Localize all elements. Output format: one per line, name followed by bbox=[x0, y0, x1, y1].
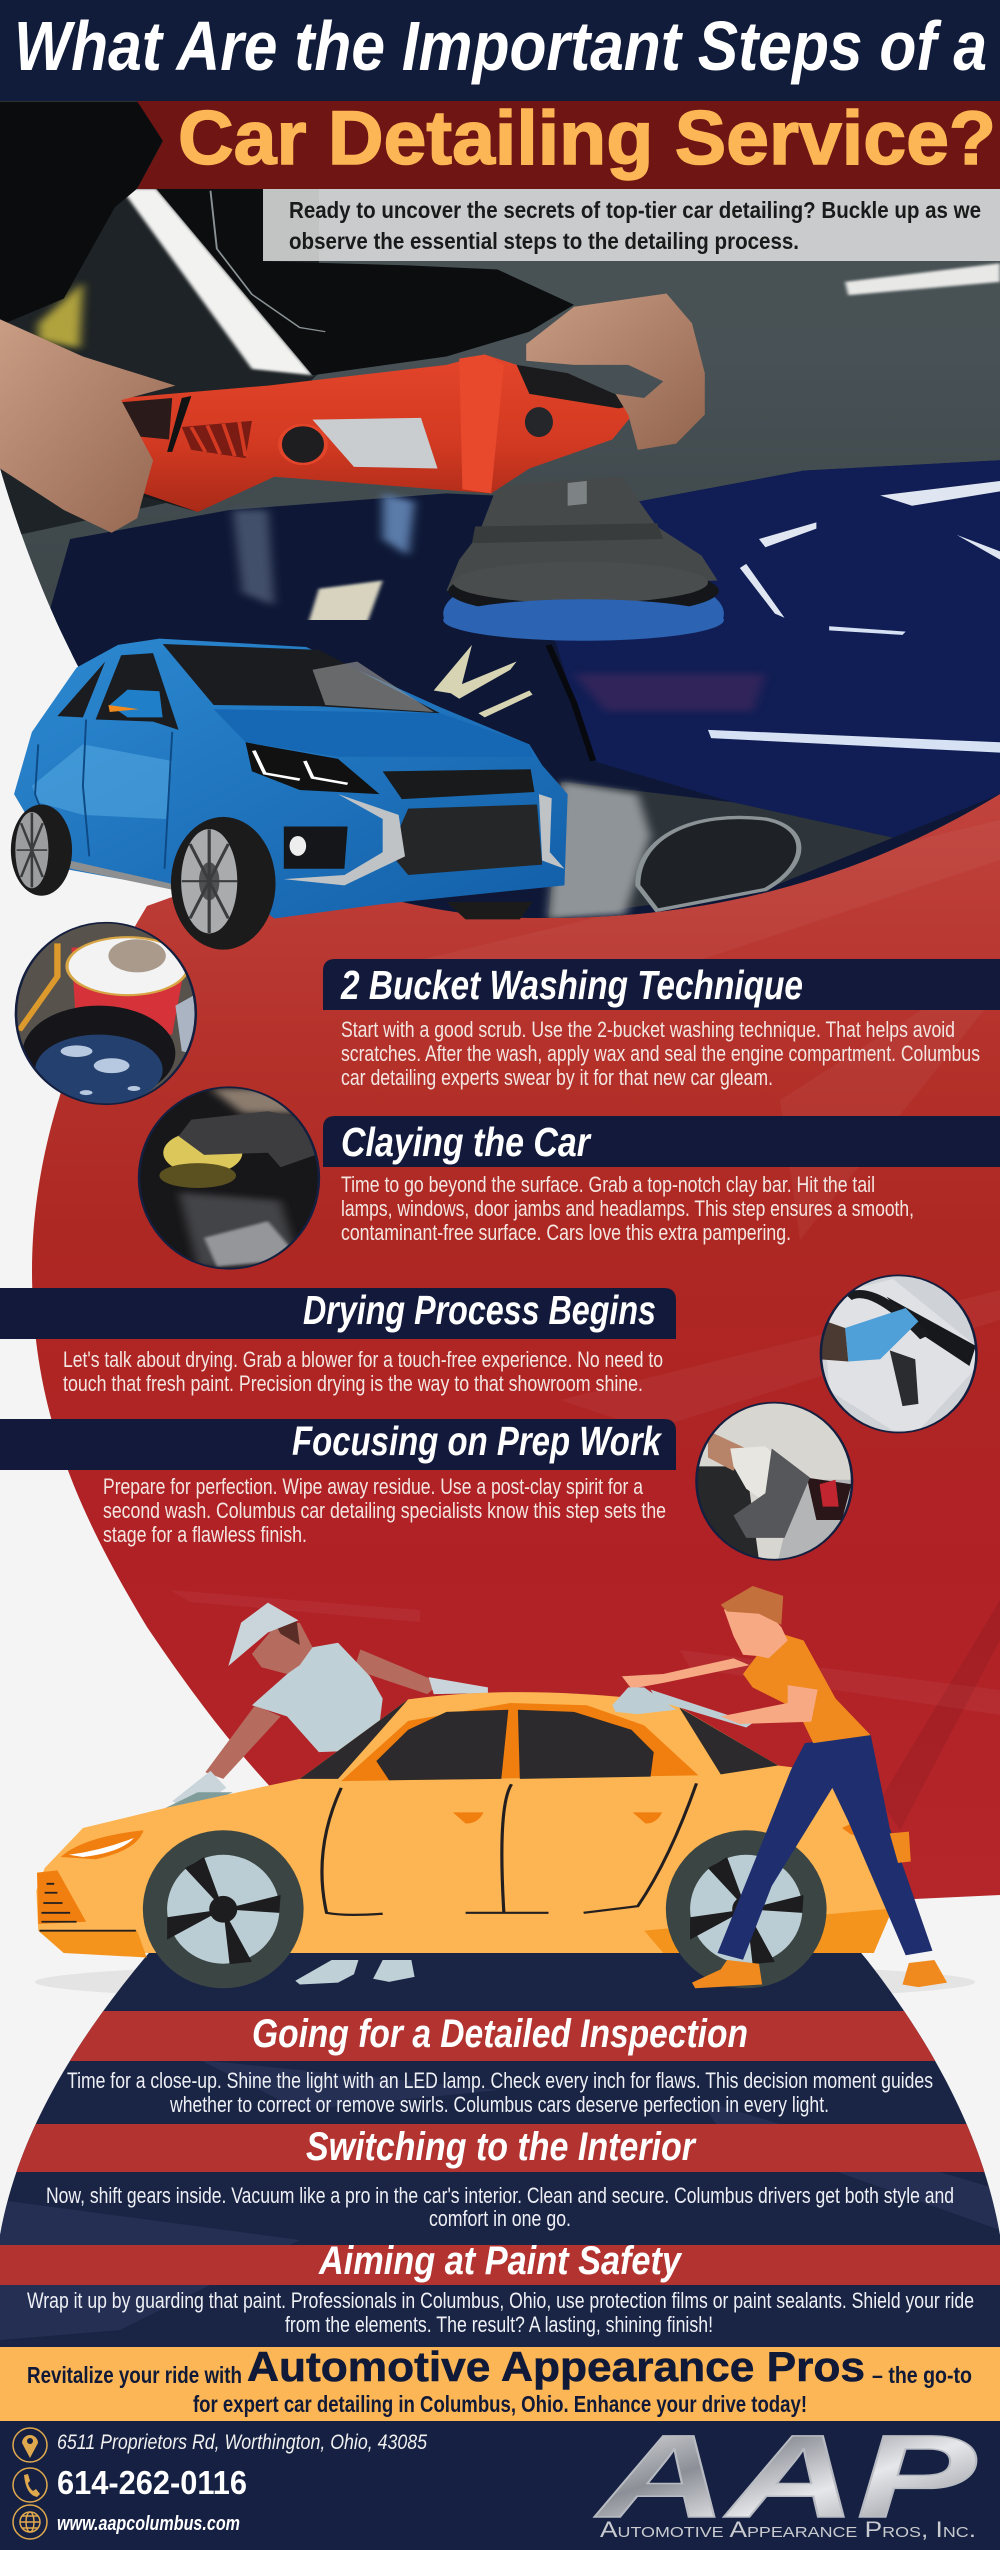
blue car: grille bbox=[383, 769, 534, 799]
shoes of both workers bbox=[295, 1960, 947, 1988]
blue car: sill bbox=[51, 856, 179, 890]
text: claying description bbox=[341, 1172, 914, 1245]
left worker bbox=[152, 1603, 488, 1820]
photo circle 3 outline bbox=[821, 1275, 976, 1432]
logo: AAP bbox=[593, 2411, 976, 2543]
right worker: legs bbox=[718, 1734, 932, 1960]
left worker: t-shirt bbox=[252, 1643, 383, 1752]
photo circle 1 outline bbox=[16, 923, 196, 1104]
text: paint safety description bbox=[27, 2288, 974, 2337]
heading: Going for a Detailed Inspection: Going for a Detailed Inspection bbox=[252, 2012, 748, 2056]
text: drying description bbox=[63, 1347, 663, 1396]
blue car: bumper tyre shadow bbox=[446, 902, 533, 919]
yellow car: front wheel bbox=[143, 1830, 304, 1988]
heading: Focusing on Prep Work: Focusing on Prep Work bbox=[292, 1418, 663, 1464]
yellow car: rear wheel bbox=[666, 1830, 827, 1988]
intro text box bbox=[263, 189, 1000, 261]
heading: Aiming at Paint Safety: Aiming at Paint Safety bbox=[318, 2239, 682, 2283]
yellow car: body bbox=[36, 1692, 893, 1953]
right worker: pocket tag bbox=[890, 1832, 911, 1863]
right worker bbox=[612, 1586, 932, 1960]
photo: blue polishing pad bbox=[443, 597, 724, 618]
call to action band: Automotive Appearance Pros bbox=[247, 2343, 865, 2390]
photo: right hand bbox=[526, 294, 705, 450]
text: address: 6511 Proprietors Rd, Worthington, Ohio, 43085 bbox=[57, 2431, 427, 2454]
text: paint safety description: from the elements. The result? A lasting, shining finish! bbox=[285, 2312, 713, 2337]
text: prep work description: Prepare for perfection. Wipe away residue. Use a post-clay spirit for a bbox=[103, 1474, 644, 1499]
photo: polisher head bbox=[446, 496, 718, 591]
right worker: near arm bbox=[721, 1685, 818, 1724]
heading: 2 Bucket Washing Technique: 2 Bucket Washing Technique bbox=[340, 962, 803, 1008]
photo circle: blower drying bbox=[820, 1274, 979, 1435]
text: bucket washing description: car detailing experts swear by it for that new car gleam. bbox=[341, 1065, 773, 1090]
heading: Focusing on Prep Work bbox=[0, 1418, 676, 1470]
logo: AAP: AAP bbox=[593, 2411, 976, 2543]
right worker: shirt bbox=[743, 1632, 871, 1743]
photo circle 4 outline bbox=[696, 1403, 852, 1560]
text: prep work description: stage for a flawless finish. bbox=[103, 1522, 307, 1547]
photo circle: clay bar bbox=[137, 1086, 322, 1271]
yellow car bbox=[36, 1692, 893, 1988]
icon: globe bbox=[13, 2505, 47, 2539]
yellow car: headlight bbox=[61, 1830, 144, 1859]
logo: AAP: Automotive Appearance Pros, Inc. bbox=[600, 2517, 976, 2542]
left worker: cloth bbox=[152, 1792, 233, 1820]
text: prep work description: second wash. Columbus car detailing specialists know this step sets the bbox=[103, 1498, 666, 1523]
text: drying description: Let's talk about drying. Grab a blower for a touch-free experience. No need to bbox=[63, 1347, 663, 1372]
call to action band bbox=[0, 2343, 1000, 2421]
red bar: Going for a Detailed Inspection bbox=[70, 2011, 936, 2061]
photo: left hand bbox=[0, 319, 175, 533]
photo circle 2 outline bbox=[139, 1087, 319, 1269]
subtitle ribbon: Car Detailing Service? bbox=[178, 96, 996, 181]
text: interior description bbox=[46, 2183, 954, 2231]
photo: upper-left black mass bbox=[0, 102, 163, 325]
left worker shoes bbox=[295, 1960, 415, 1984]
left worker: face and neck bbox=[252, 1623, 313, 1674]
text: phone number: 614-262-0116 bbox=[57, 2464, 247, 2501]
red bar: Aiming at Paint Safety bbox=[0, 2245, 1000, 2285]
blue car: door lines bbox=[35, 720, 172, 869]
photo: dark sweater bbox=[156, 189, 574, 375]
icon: location pin bbox=[13, 2428, 47, 2462]
blue car: windows bbox=[57, 644, 440, 730]
heading: Claying the Car bbox=[323, 1116, 1000, 1167]
blue car: rear wheel bbox=[11, 804, 72, 896]
shadow under yellow car bbox=[35, 1962, 975, 2002]
navy dome background bbox=[0, 1953, 1000, 2347]
yellow car: lower trim bbox=[38, 1908, 893, 1957]
icon: blue hatchback car bbox=[11, 639, 568, 1271]
photo circle: towel wipe bbox=[695, 1402, 855, 1562]
call to action band: for expert car detailing in Columbus, Ohio. Enhance your drive today! bbox=[193, 2391, 807, 2417]
yellow car: door lines bbox=[322, 1783, 696, 1915]
left worker: reaching arm bbox=[205, 1705, 281, 1779]
call to action band: Revitalize your ride with bbox=[27, 2362, 242, 2388]
blue car: body bbox=[14, 639, 568, 919]
left worker: hair bbox=[274, 1620, 300, 1645]
illustration: two workers detailing a yellow car bbox=[36, 1274, 979, 1988]
photo: sweater fuzzy edge bbox=[210, 191, 325, 332]
blue car: hood shading bbox=[214, 709, 533, 757]
text: claying description: contaminant-free surface. Cars love this extra pampering. bbox=[341, 1220, 791, 1245]
right worker: far arm bbox=[622, 1658, 749, 1689]
photo: light streaks bbox=[38, 189, 1000, 375]
blue car: front wheel bbox=[171, 817, 276, 950]
blue car: mirror bbox=[110, 690, 163, 717]
heading: Drying Process Begins bbox=[0, 1287, 676, 1339]
blue car: fog lamp bbox=[284, 826, 348, 869]
heading: Drying Process Begins: Drying Process Begins bbox=[303, 1287, 656, 1333]
text: interior description: comfort in one go. bbox=[429, 2206, 571, 2231]
right worker: hair bbox=[721, 1586, 783, 1625]
left worker: arm on roof bbox=[354, 1649, 440, 1694]
right worker: neck and face bbox=[724, 1609, 788, 1658]
photo: lower car body bbox=[0, 599, 1000, 919]
yellow car: window surround bbox=[341, 1703, 698, 1781]
hero photo: polishing a car bbox=[0, 101, 1000, 931]
photo: red polisher body bbox=[96, 354, 638, 512]
call to action band: – the go-to bbox=[872, 2362, 972, 2388]
heading: Claying the Car: Claying the Car bbox=[341, 1119, 592, 1165]
yellow car: door handles bbox=[453, 1812, 662, 1824]
right worker shoes bbox=[692, 1960, 947, 1988]
blue car: side highlight bbox=[32, 744, 172, 819]
text: drying description: touch that fresh paint. Precision drying is the way to that showroom shine. bbox=[63, 1371, 643, 1396]
blue car: windshield reflection bbox=[313, 661, 434, 712]
intro text box: observe the essential steps to the detailing process. bbox=[289, 228, 799, 254]
text: prep work description bbox=[103, 1474, 666, 1547]
text: website: www.aapcolumbus.com bbox=[57, 2513, 240, 2535]
blue car: headlight bbox=[246, 742, 379, 794]
photo: dark left background bbox=[0, 102, 319, 539]
heading: Switching to the Interior: Switching to the Interior bbox=[306, 2125, 697, 2169]
red background shape bbox=[32, 780, 1000, 1900]
text: inspection description: whether to correct or remove swirls. Columbus cars deserve perfection in every light. bbox=[169, 2092, 829, 2117]
photo: navy car hood bbox=[38, 460, 1000, 650]
footer bbox=[0, 2411, 1000, 2550]
yellow car: tail light bbox=[842, 1815, 877, 1835]
icon: phone bbox=[13, 2468, 47, 2502]
right worker: polisher tool bbox=[612, 1687, 753, 1728]
left worker: cap bbox=[228, 1603, 298, 1666]
left worker: gloves bbox=[172, 1677, 488, 1811]
text: bucket washing description bbox=[341, 1017, 980, 1090]
blue car: lower bumper bbox=[389, 804, 542, 875]
text: inspection description bbox=[67, 2068, 933, 2117]
red bar: Switching to the Interior bbox=[0, 2124, 1000, 2172]
yellow car: windows bbox=[300, 1699, 778, 1780]
text: claying description: Time to go beyond the surface. Grab a top-notch clay bar. Hit the tail bbox=[341, 1172, 875, 1197]
photo circle: two buckets bbox=[13, 921, 201, 1107]
